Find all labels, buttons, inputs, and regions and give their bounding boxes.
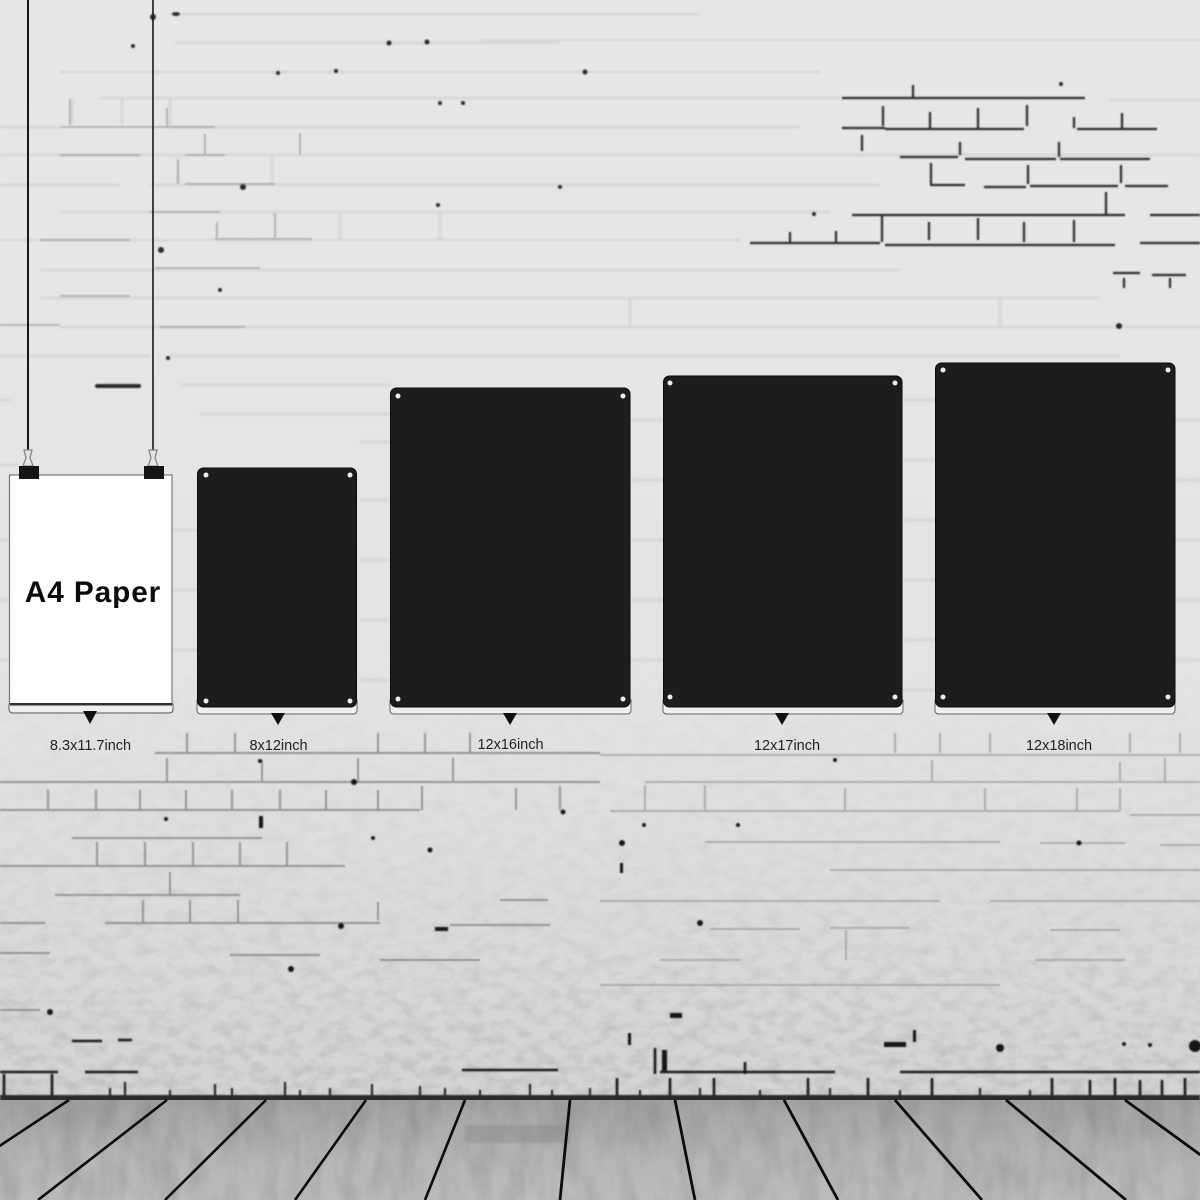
panel: 12x17 inch sign <box>663 376 903 714</box>
panel: 12x16 inch sign <box>390 388 631 714</box>
panel: 12x18 inch sign <box>935 363 1175 714</box>
specks on the upper wall <box>95 12 1122 388</box>
panel: 8x12 inch sign <box>197 468 357 714</box>
floor plank gaps <box>0 1100 1200 1200</box>
arrow: 8x12 marker <box>271 713 285 725</box>
medium mortar lines, upper left cluster <box>0 99 312 327</box>
mortar lines, lower left wall <box>0 733 600 1010</box>
specks on the lower wall <box>47 758 1200 1072</box>
wooden floor <box>0 1100 1200 1200</box>
label: 8x12 size: 8x12inch <box>249 738 308 754</box>
faint mortar lines, upper wall <box>0 14 1200 690</box>
arrow: 12x18 marker <box>1047 713 1061 725</box>
size labels <box>50 737 1092 754</box>
label: A4 size: 8.3x11.7inch <box>50 738 131 754</box>
hanging strings <box>28 0 153 450</box>
arrow: 12x16 marker <box>503 713 517 725</box>
arrow: A4 paper marker <box>83 711 97 724</box>
icon: right binder clip <box>144 450 164 479</box>
label: 12x16 size: 12x16inch <box>477 737 544 753</box>
mortar lines, lower right wall <box>600 733 1200 985</box>
paper sheet <box>10 475 172 704</box>
bottom course of bricks <box>0 1040 1200 1098</box>
label: 12x17 size: 12x17inch <box>754 738 820 754</box>
arrow: 12x17 marker <box>775 713 789 725</box>
label: 12x18 size: 12x18inch <box>1026 738 1092 754</box>
jagged base line <box>110 1082 1030 1098</box>
panel: A4 paper <box>9 475 173 713</box>
paper label: A4 Paper <box>25 576 161 609</box>
icon: left binder clip <box>19 450 39 479</box>
dark mortar lines, upper right cluster <box>750 85 1200 288</box>
paper lower shadow edge <box>9 704 173 713</box>
